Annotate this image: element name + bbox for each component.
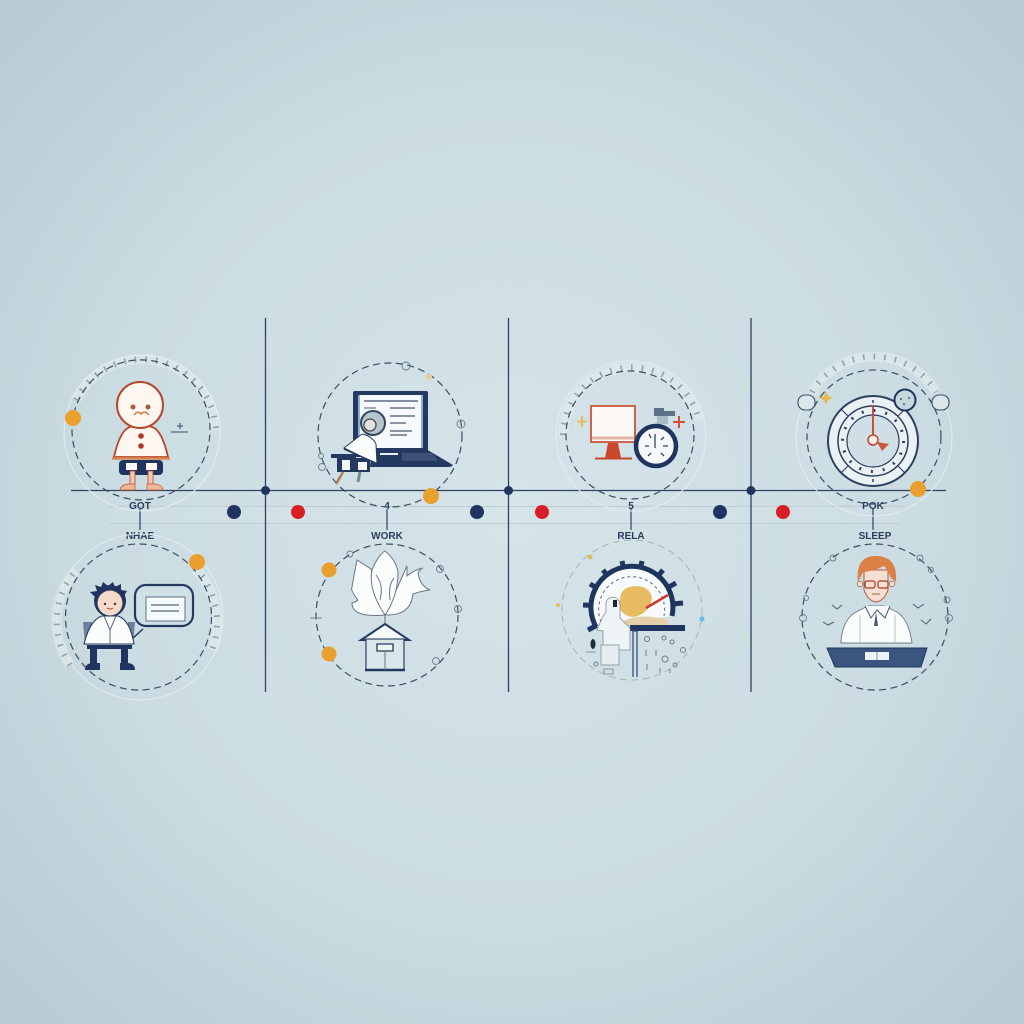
panel: person with speech bubble [57,534,223,700]
plus: red [673,416,685,428]
icon: figure [112,382,188,490]
icon: gear dial [583,561,685,677]
icon: star [819,391,833,405]
timeline dots [227,505,790,519]
small ring symbols [310,551,462,664]
icon: house [361,624,409,670]
labels and connectors: SLEEP [859,531,892,542]
panel: laptop [318,362,465,507]
labels and connectors: RELA [617,531,645,542]
panel: person at desk [800,544,952,690]
labels and connectors: WORK [371,531,404,542]
icon: standing figure [586,597,630,674]
icon: laptop [353,391,453,467]
icon: lotus [352,551,430,628]
orange marker [322,646,336,662]
labels and connectors: 4 [384,501,390,512]
labels and connectors: GOT [129,501,151,512]
icon: person [841,556,912,643]
small ring symbols [318,362,465,470]
labels and connectors: POK [862,501,885,512]
speech bubble [133,585,193,638]
timeline grid [71,318,946,692]
panel: snowman figure [64,355,220,511]
icon: main clock [828,396,918,486]
icon: small clock [894,390,916,410]
labels and connectors: NHAE [126,531,154,542]
icon: desk [827,648,927,667]
orange marker [423,488,439,504]
panel: monitor and stopwatch [556,361,706,511]
panel: gear dial [556,540,704,680]
icon: stopwatch [636,408,676,466]
panel: clock [796,357,952,516]
small ring symbols [800,555,952,622]
plus: yellow [577,416,587,427]
birds [823,604,931,625]
orange marker [322,562,336,578]
icon: monitor [591,406,635,458]
icon: seated person [331,411,385,484]
labels and connectors [126,501,892,542]
small symbols [594,636,686,673]
icon: side bubbles [798,395,949,410]
orange marker [910,481,926,497]
orange marker [65,410,81,426]
labels and connectors: 5 [628,501,634,512]
orange marker [189,554,205,570]
panel: lotus and house [310,544,462,686]
icon: seated person [83,582,135,670]
accent dots [556,555,704,622]
